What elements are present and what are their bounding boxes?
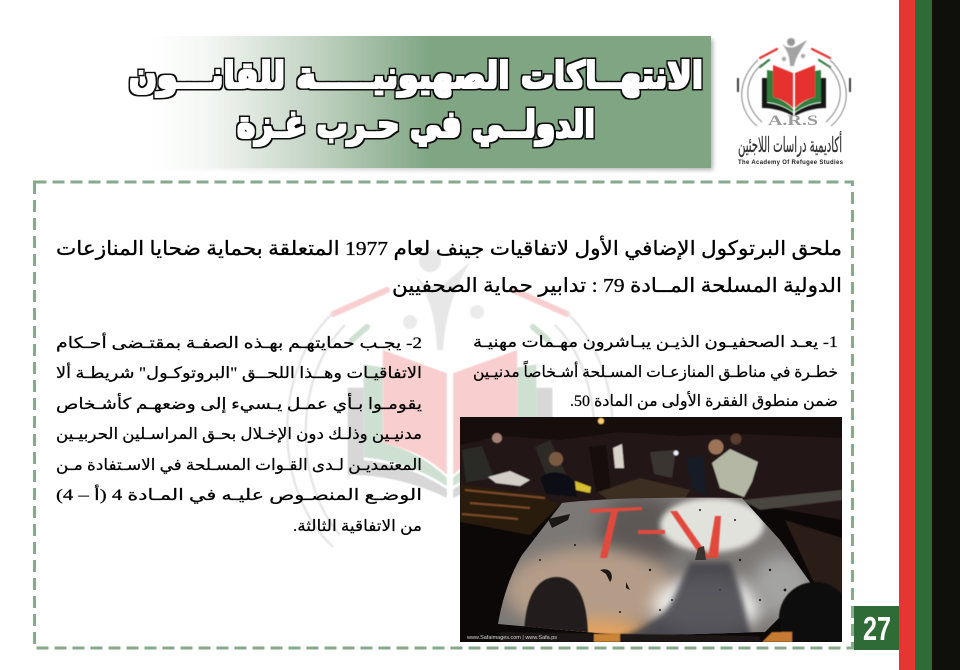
content frame: dashed border [34, 182, 852, 648]
page number [854, 606, 899, 650]
text block: paragraph 1 [473, 334, 838, 411]
text block: paragraph 2: من الاتفاقية الثالثة. [293, 518, 422, 535]
TV lettering [590, 507, 721, 558]
title line 2: الدولــي في حـرب غـزة [237, 103, 595, 146]
text block: paragraph 1: خطـرة في مناطـق المنازعـات المسـلحة أشـخاصاً مدنيـين [473, 361, 838, 382]
title banner [129, 36, 713, 170]
logo initials: A.R.S [768, 113, 818, 129]
text block: paragraph 2: يقومـوا بـأي عمـل يـسيء إلى وضعهـم كأشـخاص [56, 393, 422, 414]
logo: Academy of Refugee Studies: أكاديمية دراسات اللاجئين [738, 131, 842, 157]
crowd background [460, 417, 842, 610]
text block: paragraph 2: الوضـع المنصـوص عليـه في المـادة 4 (أ – 4) [56, 484, 422, 505]
stripes: side flag bars [899, 0, 960, 670]
car hood [498, 498, 810, 635]
icon: open book and figures [738, 38, 850, 126]
text block: paragraph 1: ضمن منطوق الفقرة الأولى من المادة 50. [570, 391, 838, 411]
heading: الدولية المسلحة المــادة 79 : تدابير حماية الصحفيين [392, 275, 842, 297]
photo: journalist's car hood marked TV [460, 417, 851, 654]
logo English name: The Academy Of Refugee Studies [738, 160, 844, 166]
title line 1: الانتهــاكات الصهيونيـــــة للقانـــون [129, 54, 703, 97]
watermark: faded academy emblem [287, 250, 613, 547]
hood speckles [539, 509, 786, 613]
heading [56, 236, 842, 297]
heading: ملحق البرتوكول الإضافي الأول لاتفاقيات جينف لعام 1977 المتعلقة بحماية ضحايا المنازعات [56, 236, 842, 261]
text block: paragraph 2: الاتفاقيـات وهــذا اللحــق "البروتوكـول" شريطـة ألا [56, 362, 422, 383]
text block: paragraph 2: مدنيـين وذلـك دون الإخـلال بحـق المراسـلين الحربيـين [56, 426, 422, 444]
text block: paragraph 2 [56, 332, 422, 535]
text block: paragraph 1: 1- يعـد الصحفيـون الذيـن يبـاشرون مهـمات مهنيـة [473, 334, 838, 352]
text block: paragraph 2: المعتمديـن لـدى القـوات المسـلحة في الاسـتفادة مـن [56, 457, 422, 475]
text block: paragraph 2: 2- يجـب حمايتهـم بهـذه الصفـة بمقتـضى أحـكام [56, 332, 422, 353]
photo credit: www.Safaimages.com | www.Safa.ps [466, 635, 557, 641]
logo: Academy of Refugee Studies [738, 38, 850, 166]
shadows on hood [524, 546, 752, 640]
page number: 27 [863, 610, 891, 647]
